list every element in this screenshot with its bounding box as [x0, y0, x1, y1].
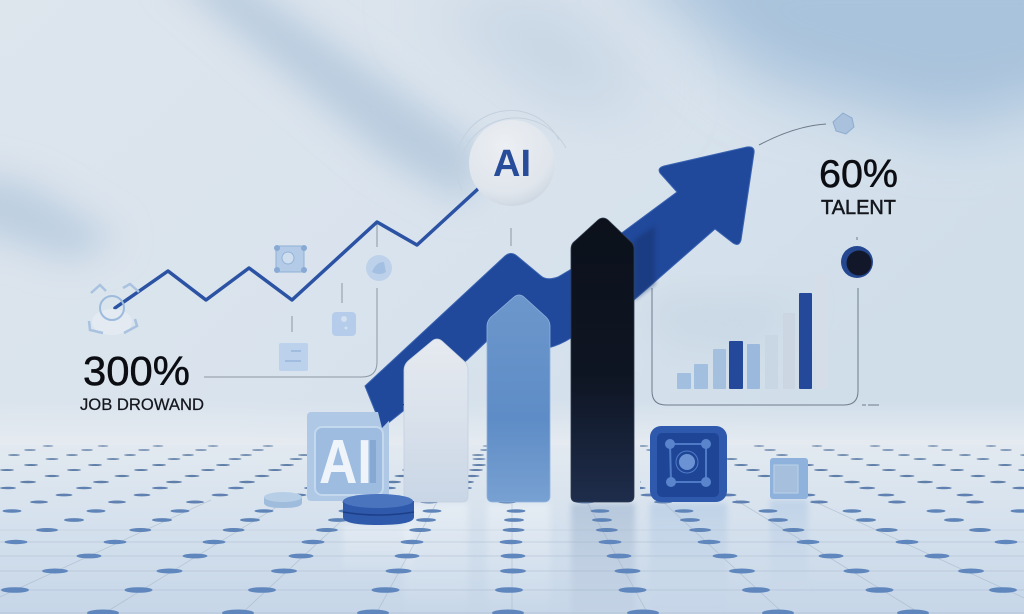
small light cube: [770, 458, 808, 499]
AI orb: [456, 110, 566, 206]
bar: navy: [571, 218, 634, 502]
icon: small tile: [332, 312, 356, 336]
mini bar chart: [677, 275, 828, 389]
shadow of dark bar on arrow: [634, 226, 655, 300]
stat: 60% talent: TALENT: [821, 197, 896, 219]
AI cube: [307, 412, 389, 501]
blue chip cube: [650, 426, 727, 502]
stat: 300% job demand: [80, 348, 204, 414]
AI cube: AI: [319, 428, 372, 497]
icon: gear at start of line: [89, 284, 139, 335]
line chart: [115, 188, 479, 308]
icon: hexagon node: [833, 113, 854, 134]
background: [0, 0, 1024, 450]
connector frame: talent chart: [652, 124, 879, 405]
bar: mid blue: [487, 295, 550, 502]
arrow tail over cube corner: [378, 402, 404, 428]
stat: 300% job demand: JOB DROWAND: [80, 395, 204, 414]
stat: 60% talent: 60%: [819, 153, 898, 196]
icon: lower tile: [279, 343, 308, 371]
blue disc stack: [343, 494, 414, 525]
floor dots: [0, 442, 1024, 614]
connector frame: job demand: [204, 222, 511, 377]
stat: 60% talent: [819, 153, 898, 219]
icon: square gear: [274, 245, 307, 273]
floor reflections: [343, 500, 808, 614]
big rising arrow: [365, 147, 754, 428]
floor with dot grid: [0, 442, 1024, 614]
stat: 300% job demand: 300%: [83, 348, 190, 394]
icon: round badge: [366, 255, 392, 281]
small light disc: [264, 492, 302, 508]
icon: dark knob: [841, 237, 873, 278]
AI orb: AI: [493, 143, 531, 185]
bar: white: [404, 339, 468, 502]
